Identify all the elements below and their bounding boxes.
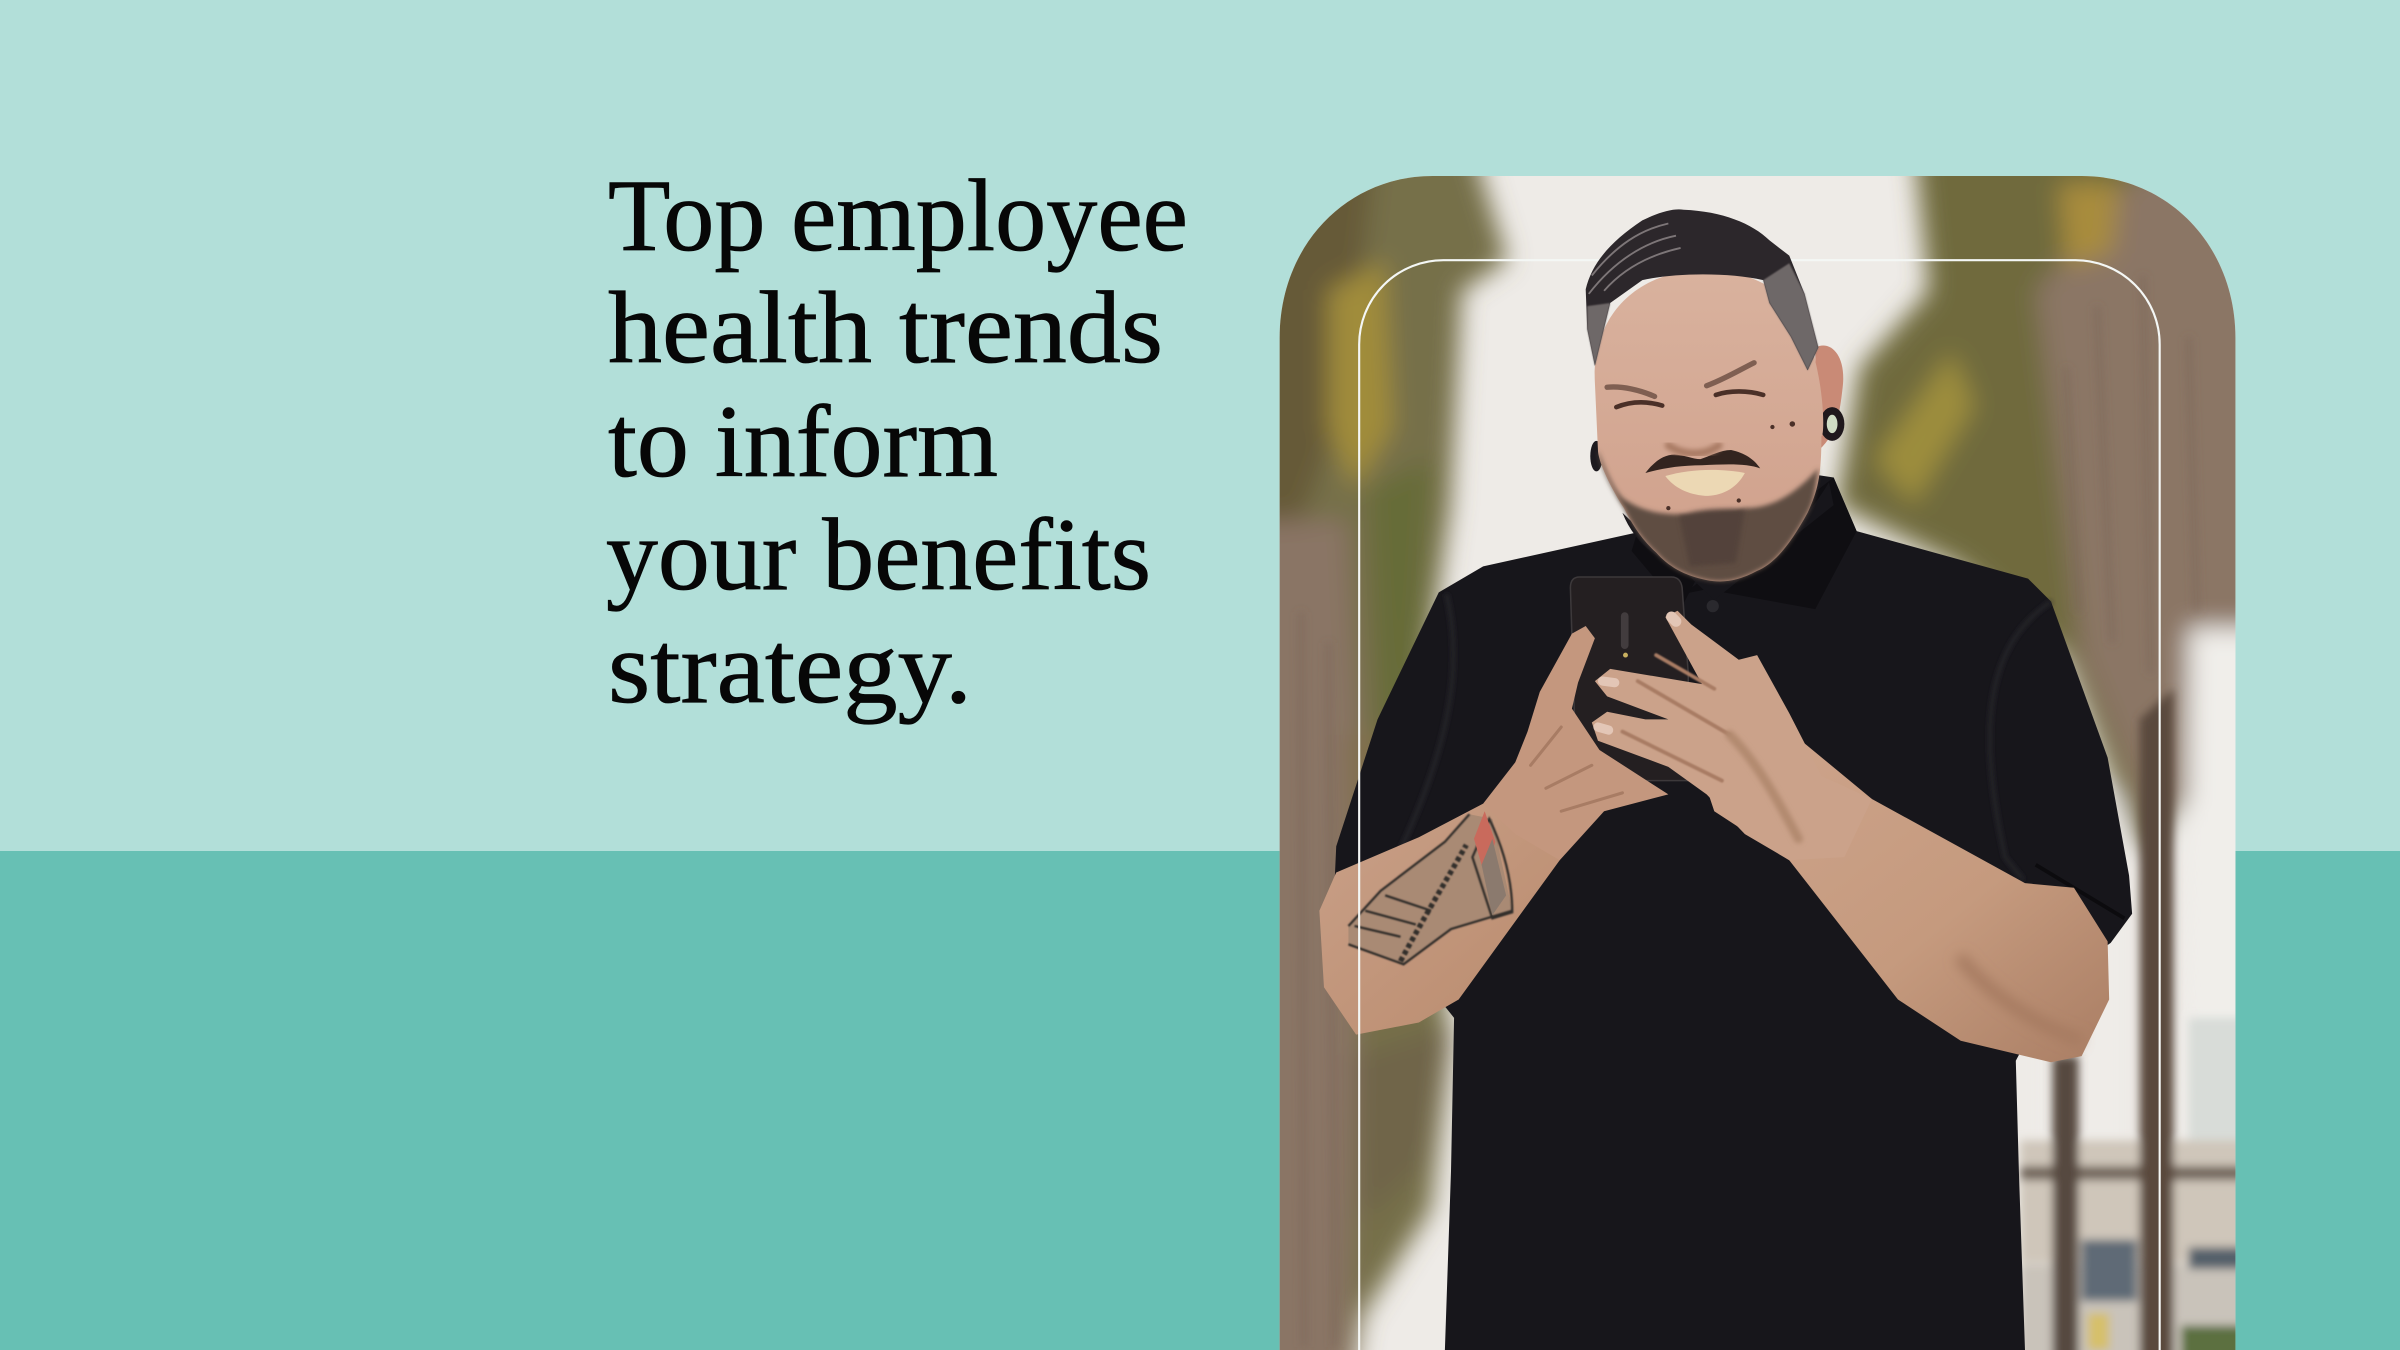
- right hand: [1592, 611, 1872, 860]
- shirt: [1335, 459, 2132, 1350]
- hair: [1586, 209, 1818, 370]
- hair fade: [1763, 263, 1818, 370]
- title: Top employee: [608, 159, 1188, 273]
- title: to inform: [608, 385, 998, 499]
- smile: [1665, 470, 1745, 496]
- face: [1595, 269, 1823, 581]
- white outline frame: [1359, 260, 2160, 1350]
- photo: man smiling at his phone: [1280, 176, 2236, 1350]
- left palm: [1286, 176, 1522, 1350]
- title: [606, 159, 1188, 725]
- left forearm with tattoo: [1319, 804, 1577, 1035]
- head: [1586, 209, 1844, 600]
- right palm: [1837, 138, 2311, 857]
- title: your benefits: [606, 498, 1151, 612]
- left hand: [1483, 626, 1668, 860]
- ear: [1815, 345, 1843, 453]
- background: light mint upper band: [0, 0, 2400, 851]
- phone: [1570, 577, 1688, 781]
- moles: [1666, 421, 1795, 510]
- ear plug right: [1820, 407, 1844, 441]
- mustache: [1645, 450, 1760, 473]
- ear plug left: [1590, 441, 1603, 471]
- title: strategy.: [608, 611, 972, 725]
- collar: [1684, 478, 1857, 609]
- photo background: blurred palms and sky: [1280, 176, 2236, 1350]
- beard: [1598, 450, 1818, 581]
- background: teal lower band: [0, 851, 2400, 1350]
- tattoo: [1348, 814, 1512, 964]
- title: health trends: [608, 271, 1163, 385]
- right forearm: [1710, 744, 2110, 1062]
- eyes and brows: [1607, 363, 1763, 453]
- neck shadow: [1622, 482, 1834, 600]
- hands: [1483, 611, 1872, 860]
